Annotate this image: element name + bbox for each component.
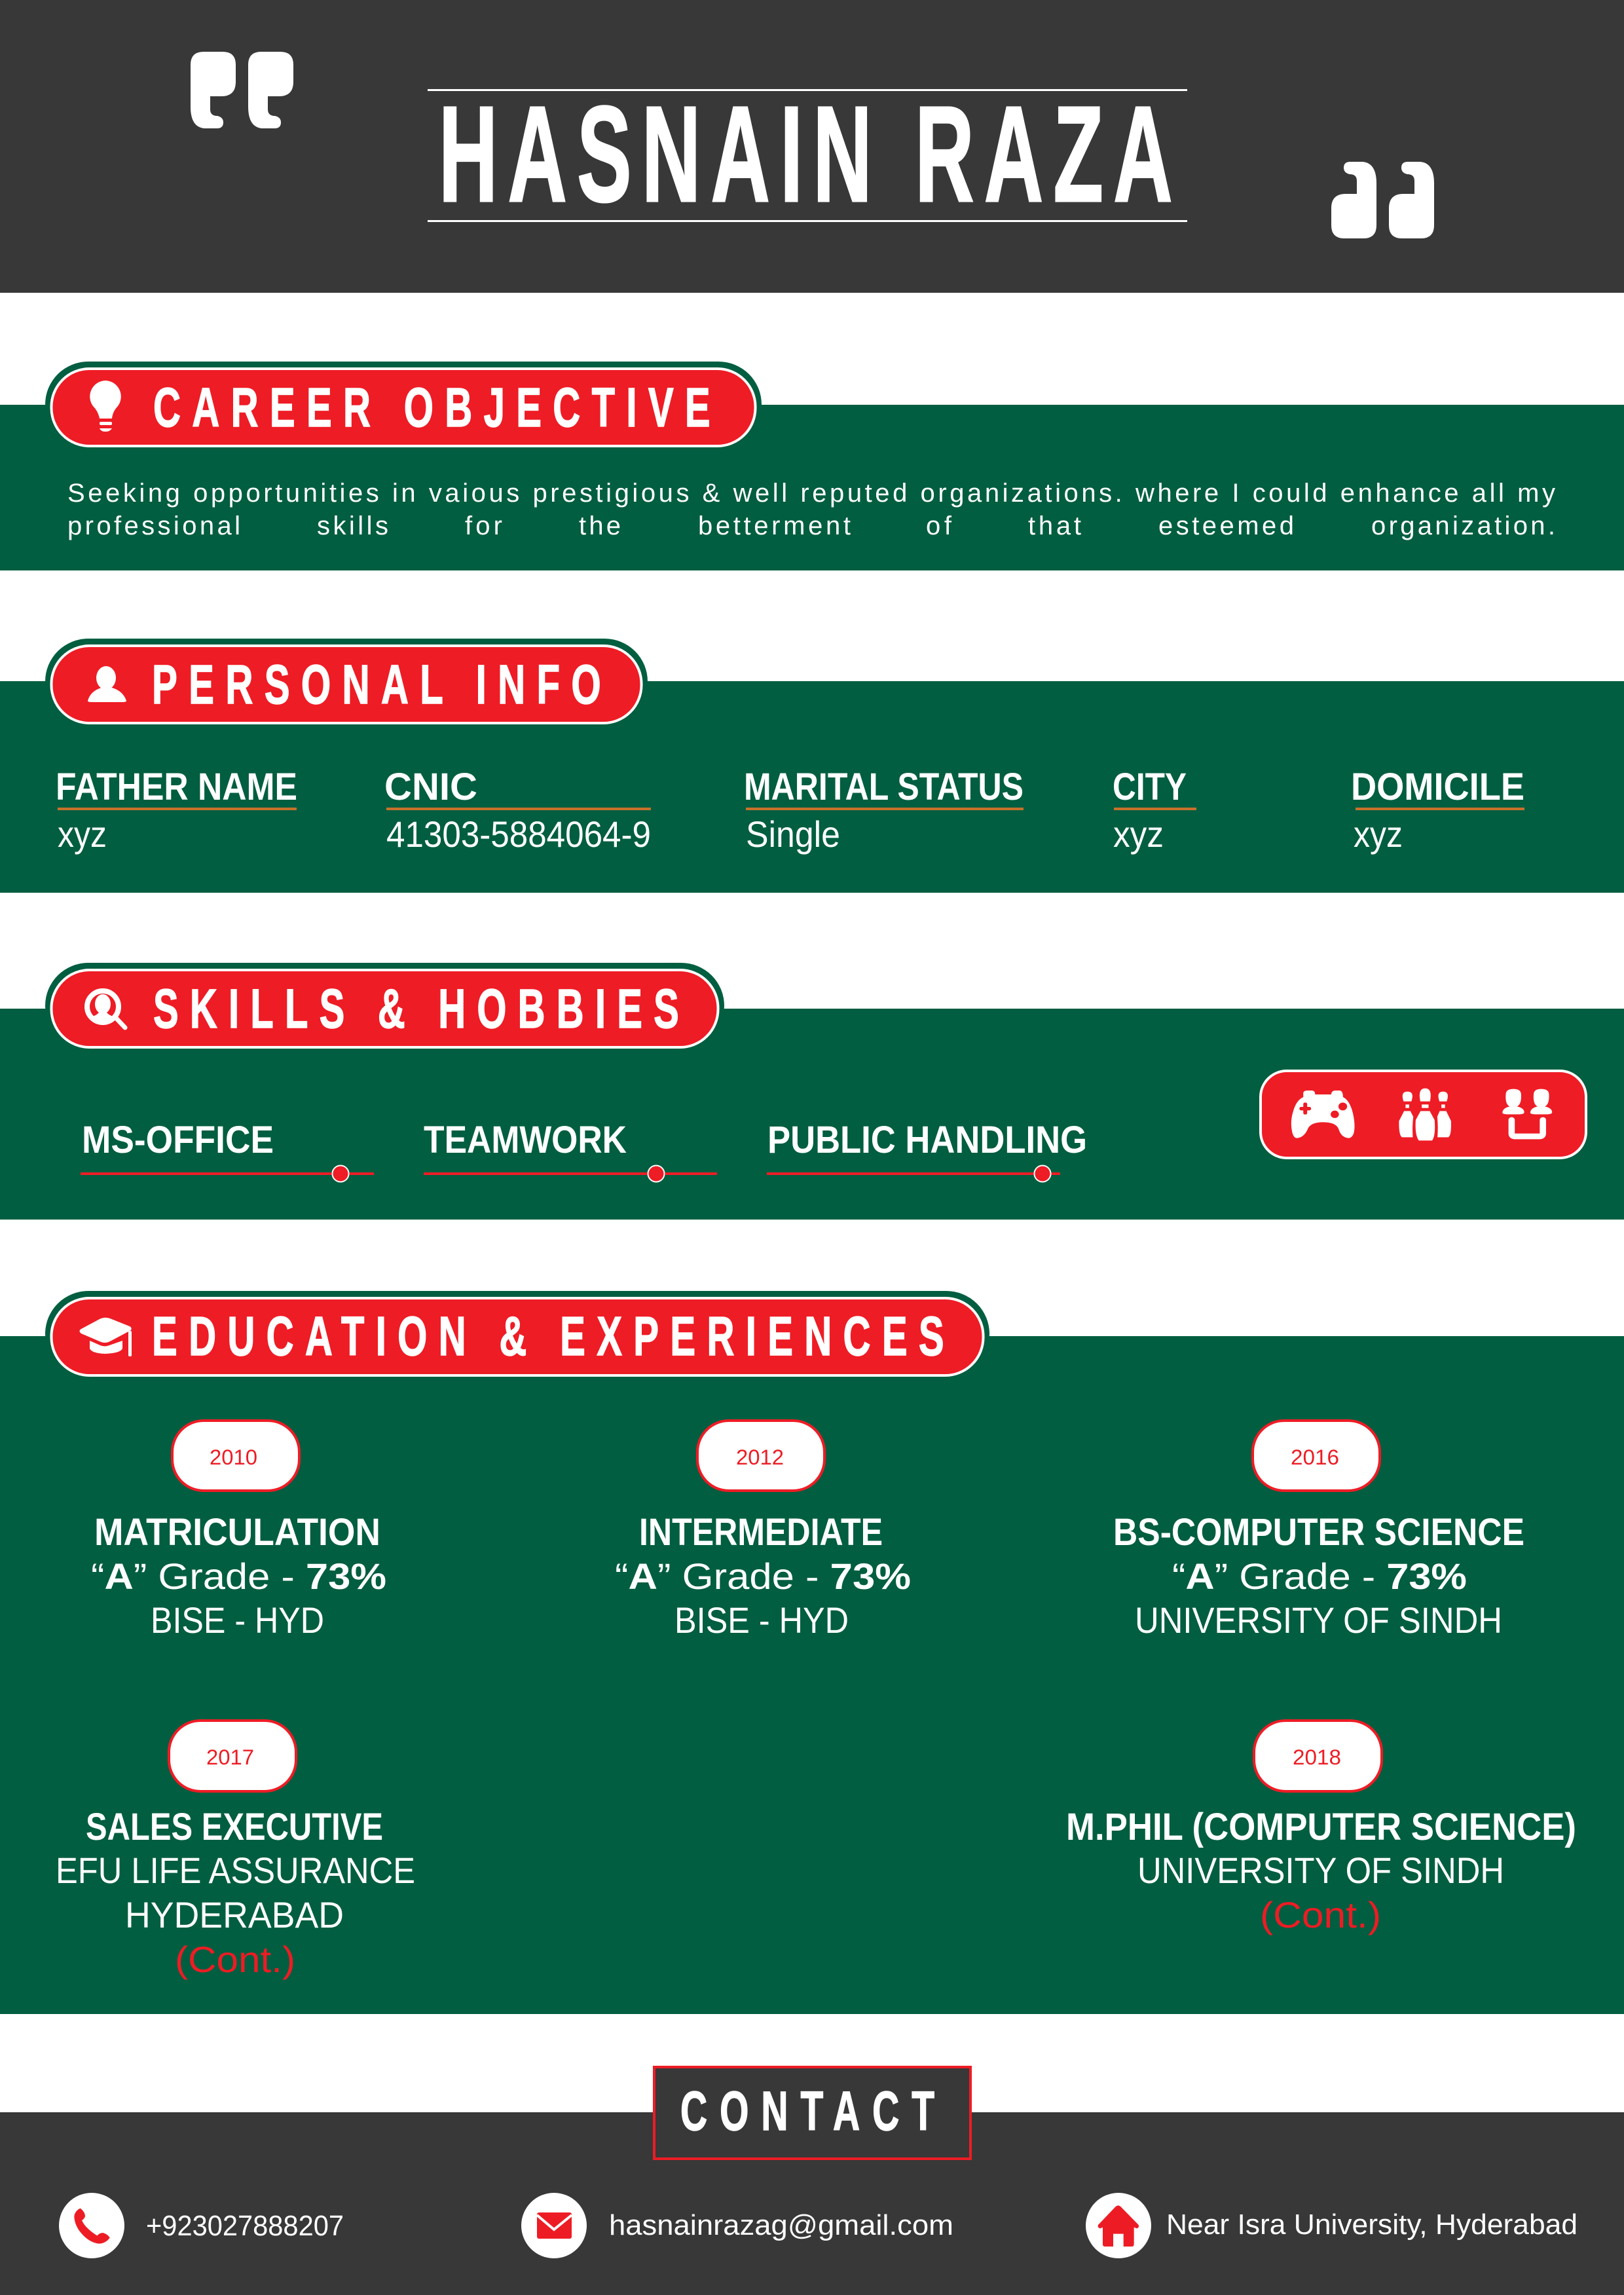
contact heading box [654, 2067, 970, 2159]
field: father name: xyz [58, 813, 107, 855]
skill: teamwork: TEAMWORK [424, 1119, 627, 1161]
entry: bs computer science 2016: UNIVERSITY OF SINDH [1135, 1599, 1502, 1641]
heading pill: skills and hobbies [51, 970, 718, 1047]
field: marital status: MARITAL STATUS [744, 766, 1024, 808]
entry: sales executive 2017: 2017 [206, 1745, 254, 1769]
contact: email [521, 2193, 953, 2258]
entry: m.phil computer science 2018: 2018 [1293, 1745, 1341, 1769]
panel: career objective [0, 362, 1624, 570]
heading text: EDUCATION & EXPERIENCES [152, 1305, 955, 1367]
entry: matriculation 2010: 2010 [210, 1446, 257, 1469]
panel: education and experiences [0, 1291, 1624, 2014]
skill: teamwork [424, 1119, 717, 1182]
career objective paragraph: skills [317, 512, 388, 540]
contact: phone [59, 2193, 344, 2258]
entry: m.phil computer science 2018 [1066, 1721, 1576, 1935]
contact: address [1086, 2193, 1578, 2258]
entry: sales executive 2017: (Cont.) [175, 1939, 295, 1980]
entry: intermediate 2012: 2012 [736, 1446, 784, 1469]
panel: personal info [0, 639, 1624, 893]
heading pill: career objective [51, 369, 756, 446]
heading text: SKILLS & HOBBIES [153, 978, 690, 1039]
heading pill: education and experiences [51, 1298, 984, 1375]
career objective paragraph: for [465, 512, 502, 540]
entry: matriculation 2010: BISE - HYD [151, 1599, 324, 1641]
career objective paragraph: professional [67, 512, 240, 540]
title rule top [428, 89, 1187, 91]
entry: sales executive 2017: EFU LIFE ASSURANCE [56, 1850, 415, 1891]
career objective paragraph: betterment [698, 512, 851, 540]
career objective paragraph: that [1028, 512, 1081, 540]
icon: graduation cap [80, 1318, 132, 1356]
field: marital status: Single [746, 813, 840, 855]
career objective paragraph: Seeking opportunities in vaious prestigious & well reputed organizations. where I could enhance all my [67, 479, 1555, 508]
contact: email: hasnainrazag@gmail.com [609, 2209, 953, 2241]
field: city [1113, 766, 1196, 855]
heading text: CAREER OBJECTIVE [153, 377, 722, 438]
field: father name [56, 766, 297, 855]
heading text: PERSONAL INFO [152, 654, 612, 715]
entry: intermediate 2012: INTERMEDIATE [639, 1511, 883, 1554]
skill: ms-office [81, 1119, 374, 1182]
icon: light bulb [90, 381, 121, 432]
title rule bottom [428, 220, 1187, 222]
entry: bs computer science 2016: BS-COMPUTER SCIENCE [1113, 1511, 1524, 1554]
field: domicile: DOMICILE [1351, 766, 1524, 808]
field: cnic: CNIC [384, 766, 477, 808]
field: city: xyz [1113, 813, 1164, 855]
field: father name: FATHER NAME [56, 766, 297, 808]
entry: intermediate 2012: BISE - HYD [674, 1599, 849, 1641]
entry: bs computer science 2016 [1113, 1421, 1524, 1641]
entry: matriculation 2010 [91, 1421, 386, 1641]
panel: skills and hobbies [0, 963, 1624, 1220]
field: domicile: xyz [1354, 813, 1403, 855]
field: city: CITY [1113, 766, 1187, 808]
field: marital status [744, 766, 1024, 855]
career objective paragraph: of [926, 512, 952, 540]
entry: matriculation 2010: MATRICULATION [94, 1511, 380, 1554]
contact: phone: +923027888207 [146, 2210, 344, 2242]
header panel [0, 0, 1624, 293]
skill: public handling: PUBLIC HANDLING [767, 1119, 1087, 1161]
field: cnic: 41303-5884064-9 [386, 813, 651, 855]
entry: bs computer science 2016: “A” Grade - 73% [1172, 1556, 1467, 1597]
contact: address: Near Isra University, Hyderabad [1166, 2209, 1578, 2241]
entry: m.phil computer science 2018: M.PHIL (COMPUTER SCIENCE) [1066, 1806, 1576, 1848]
career objective paragraph: organization. [1371, 512, 1555, 540]
entry: m.phil computer science 2018: (Cont.) [1260, 1894, 1381, 1935]
panel: contact footer [0, 2067, 1624, 2295]
entry: sales executive 2017 [56, 1721, 415, 1980]
hobbies box [1261, 1071, 1586, 1158]
icon: opening quote mark [191, 52, 293, 128]
field: cnic [384, 766, 651, 855]
icon: people with basket [1502, 1089, 1552, 1136]
career objective paragraph: the [579, 512, 621, 540]
entry: matriculation 2010: “A” Grade - 73% [91, 1556, 386, 1597]
icon: game controller [1291, 1091, 1355, 1138]
icon: person [88, 666, 126, 702]
career objective paragraph: esteemed [1158, 512, 1294, 540]
heading pill: personal info [51, 646, 642, 723]
icon: bowling pins [1399, 1089, 1451, 1140]
skill: public handling [767, 1119, 1087, 1182]
entry: m.phil computer science 2018: UNIVERSITY OF SINDH [1137, 1850, 1504, 1891]
icon: closing quote mark [1331, 162, 1434, 238]
entry: intermediate 2012 [615, 1421, 911, 1641]
career objective paragraph [67, 479, 1555, 540]
entry: sales executive 2017: SALES EXECUTIVE [86, 1806, 383, 1848]
contact heading box: CONTACT [680, 2080, 947, 2142]
skill: ms-office: MS-OFFICE [82, 1119, 274, 1161]
entry: intermediate 2012: “A” Grade - 73% [615, 1556, 911, 1597]
entry: bs computer science 2016: 2016 [1291, 1446, 1339, 1469]
field: domicile [1351, 766, 1524, 855]
icon: search person [87, 991, 125, 1028]
entry: sales executive 2017: HYDERABAD [125, 1894, 344, 1935]
